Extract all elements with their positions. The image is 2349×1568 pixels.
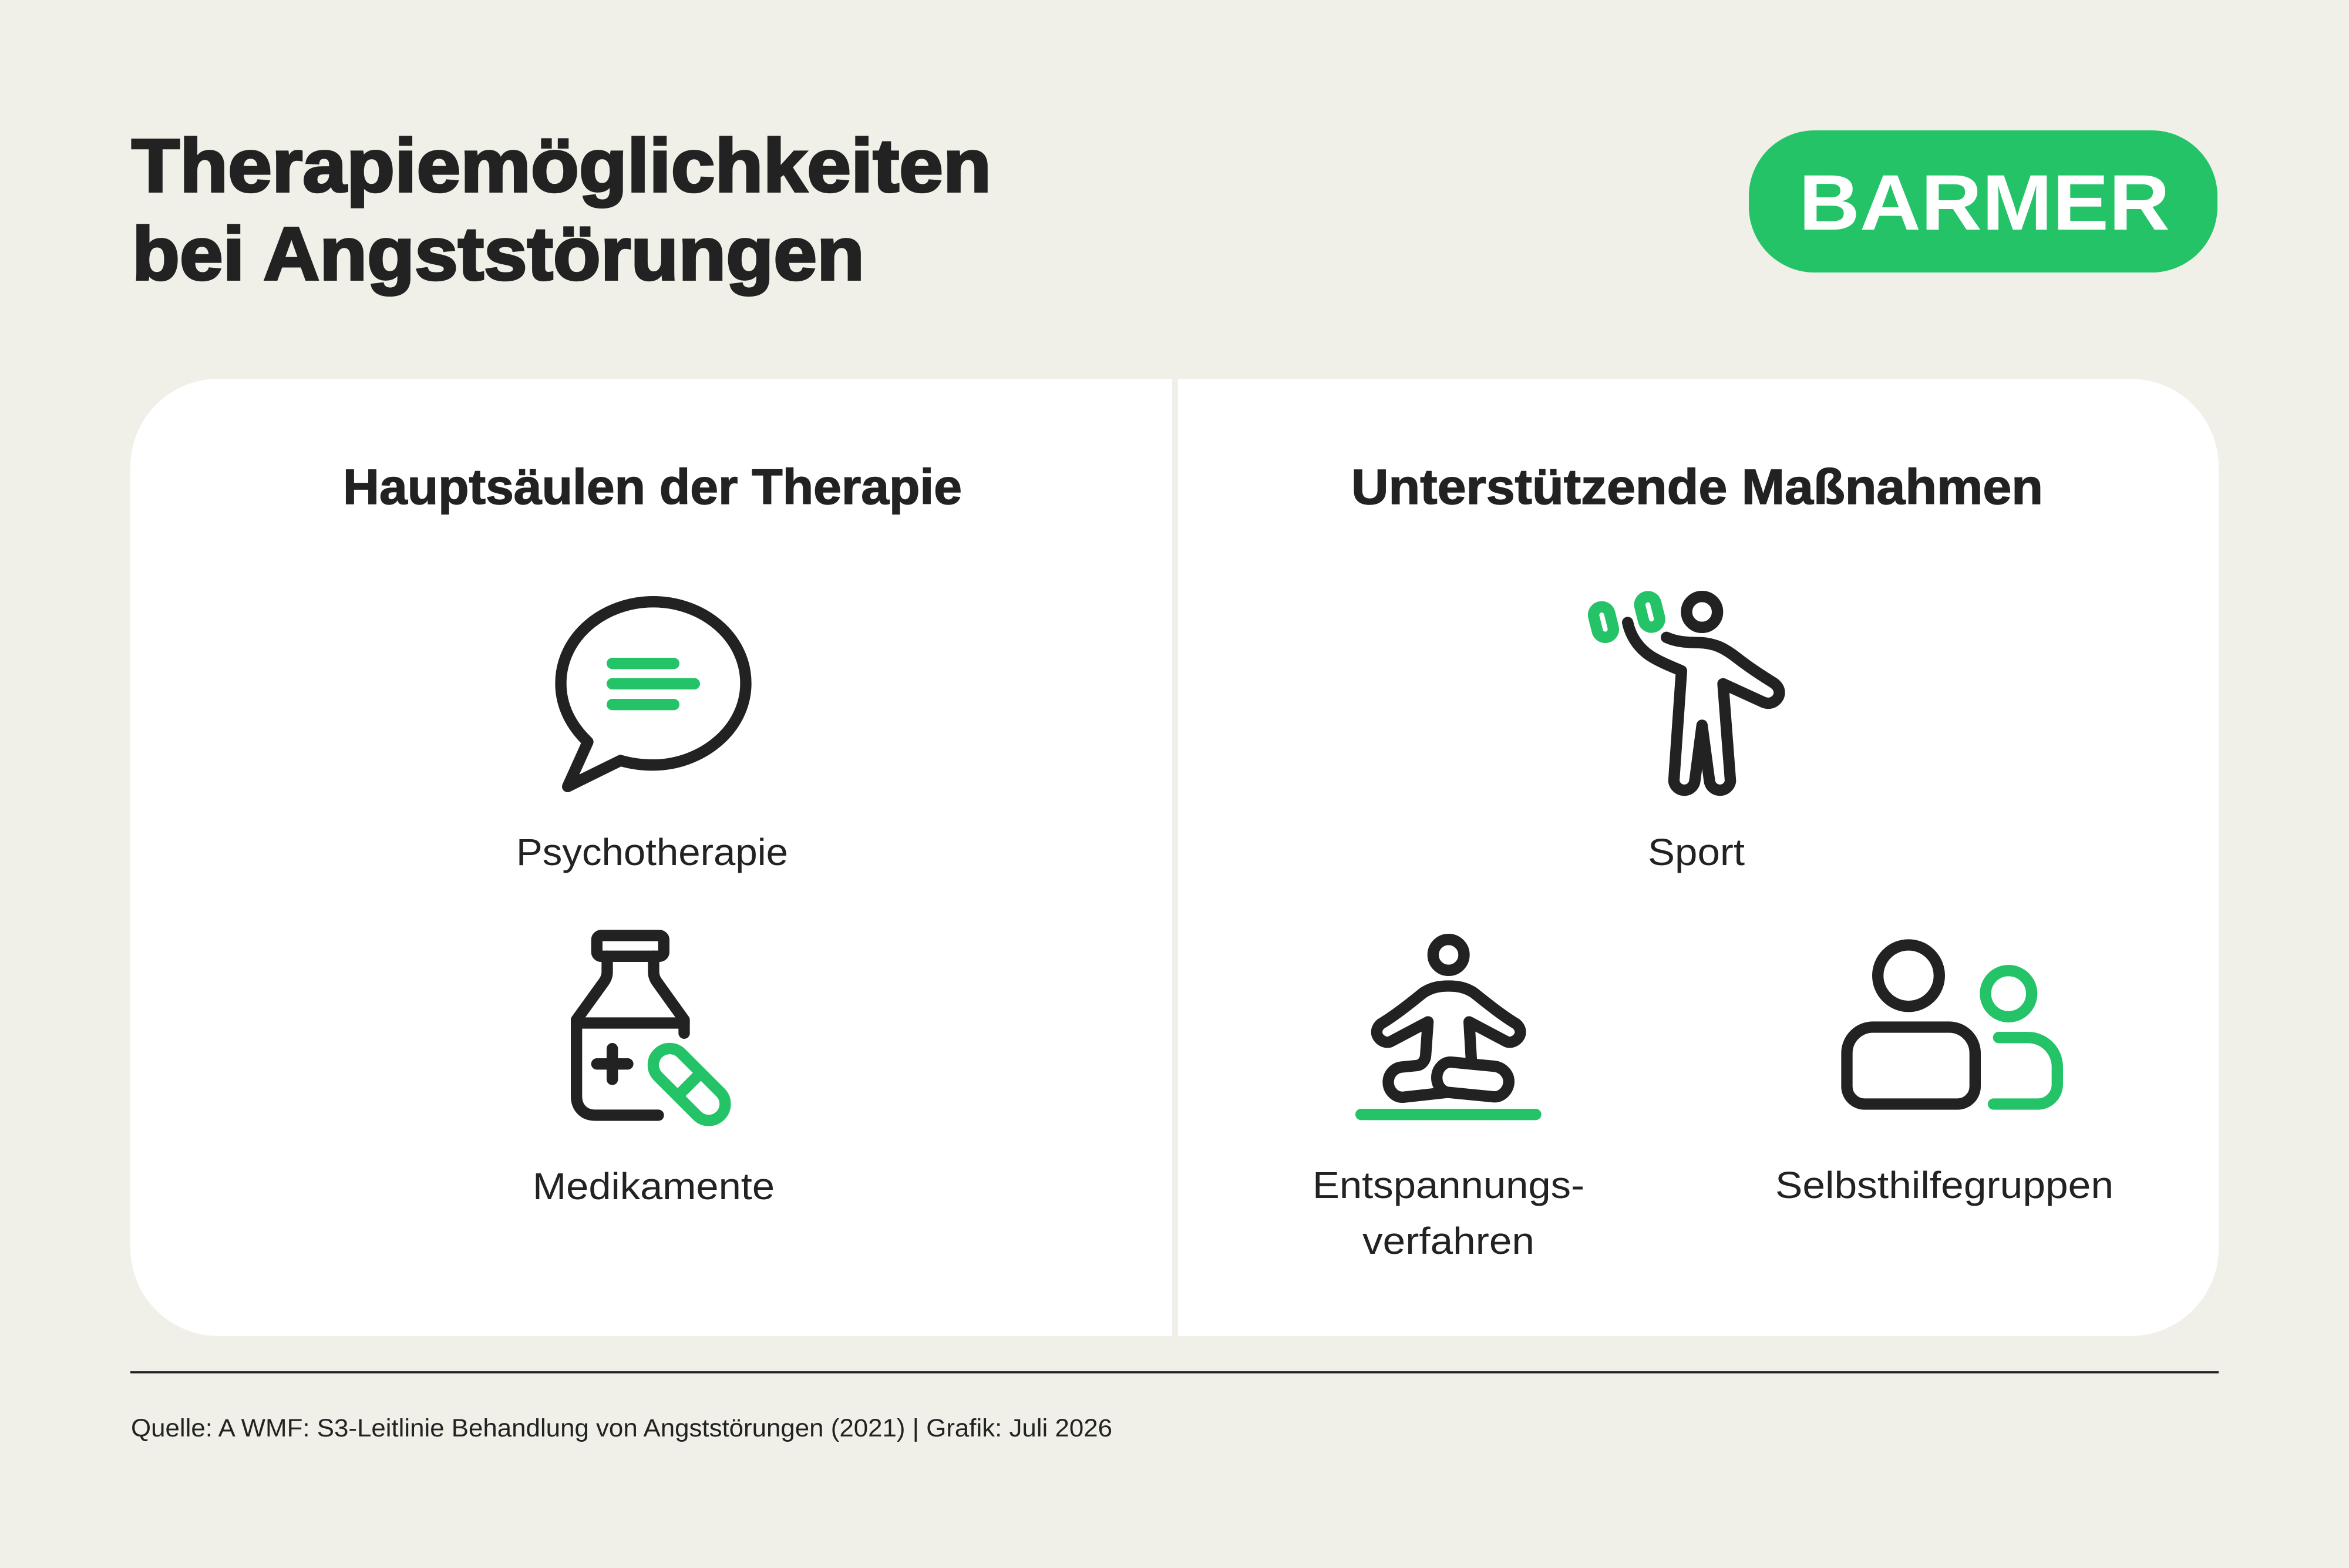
logo: BARMER: BARMER bbox=[1799, 159, 2170, 247]
label: Entspannungs-verfahren: verfahren bbox=[1362, 1220, 1534, 1262]
label: Entspannungs-verfahren: Entspannungs- bbox=[1313, 1164, 1584, 1206]
label: Medikamente: Medikamente bbox=[533, 1165, 775, 1207]
icon: speech bubble bbox=[561, 602, 746, 786]
icon: person juggling bbox=[1592, 595, 1779, 790]
label: Sport: Sport bbox=[1648, 831, 1745, 873]
icon: meditating person bbox=[1361, 940, 1536, 1115]
title bbox=[132, 124, 991, 296]
label: Selbsthilfegruppen: Selbsthilfegruppen bbox=[1775, 1164, 2114, 1206]
icon: medicine bottle with capsule bbox=[577, 936, 732, 1127]
logo: BARMER bbox=[1749, 130, 2217, 272]
heading: Unterstützende Maßnahmen: Unterstützende Maßnahmen bbox=[1351, 459, 2043, 514]
panel: therapy card bbox=[130, 379, 2219, 1336]
label: Psychotherapie: Psychotherapie bbox=[516, 831, 788, 873]
icon: self-help group bbox=[1847, 945, 2057, 1104]
heading: Hauptsäulen der Therapie: Hauptsäulen der Therapie bbox=[343, 459, 962, 514]
footer rule bbox=[130, 1371, 2219, 1373]
source note: Quelle: A WMF: S3-Leitlinie Behandlung von Angststörungen (2021) | Grafik: Juli 2026 bbox=[131, 1414, 1112, 1442]
title: Therapiemöglichkeiten bbox=[132, 124, 991, 208]
title: bei Angststörungen bbox=[132, 212, 864, 296]
label: Entspannungs-verfahren bbox=[1313, 1164, 1584, 1262]
